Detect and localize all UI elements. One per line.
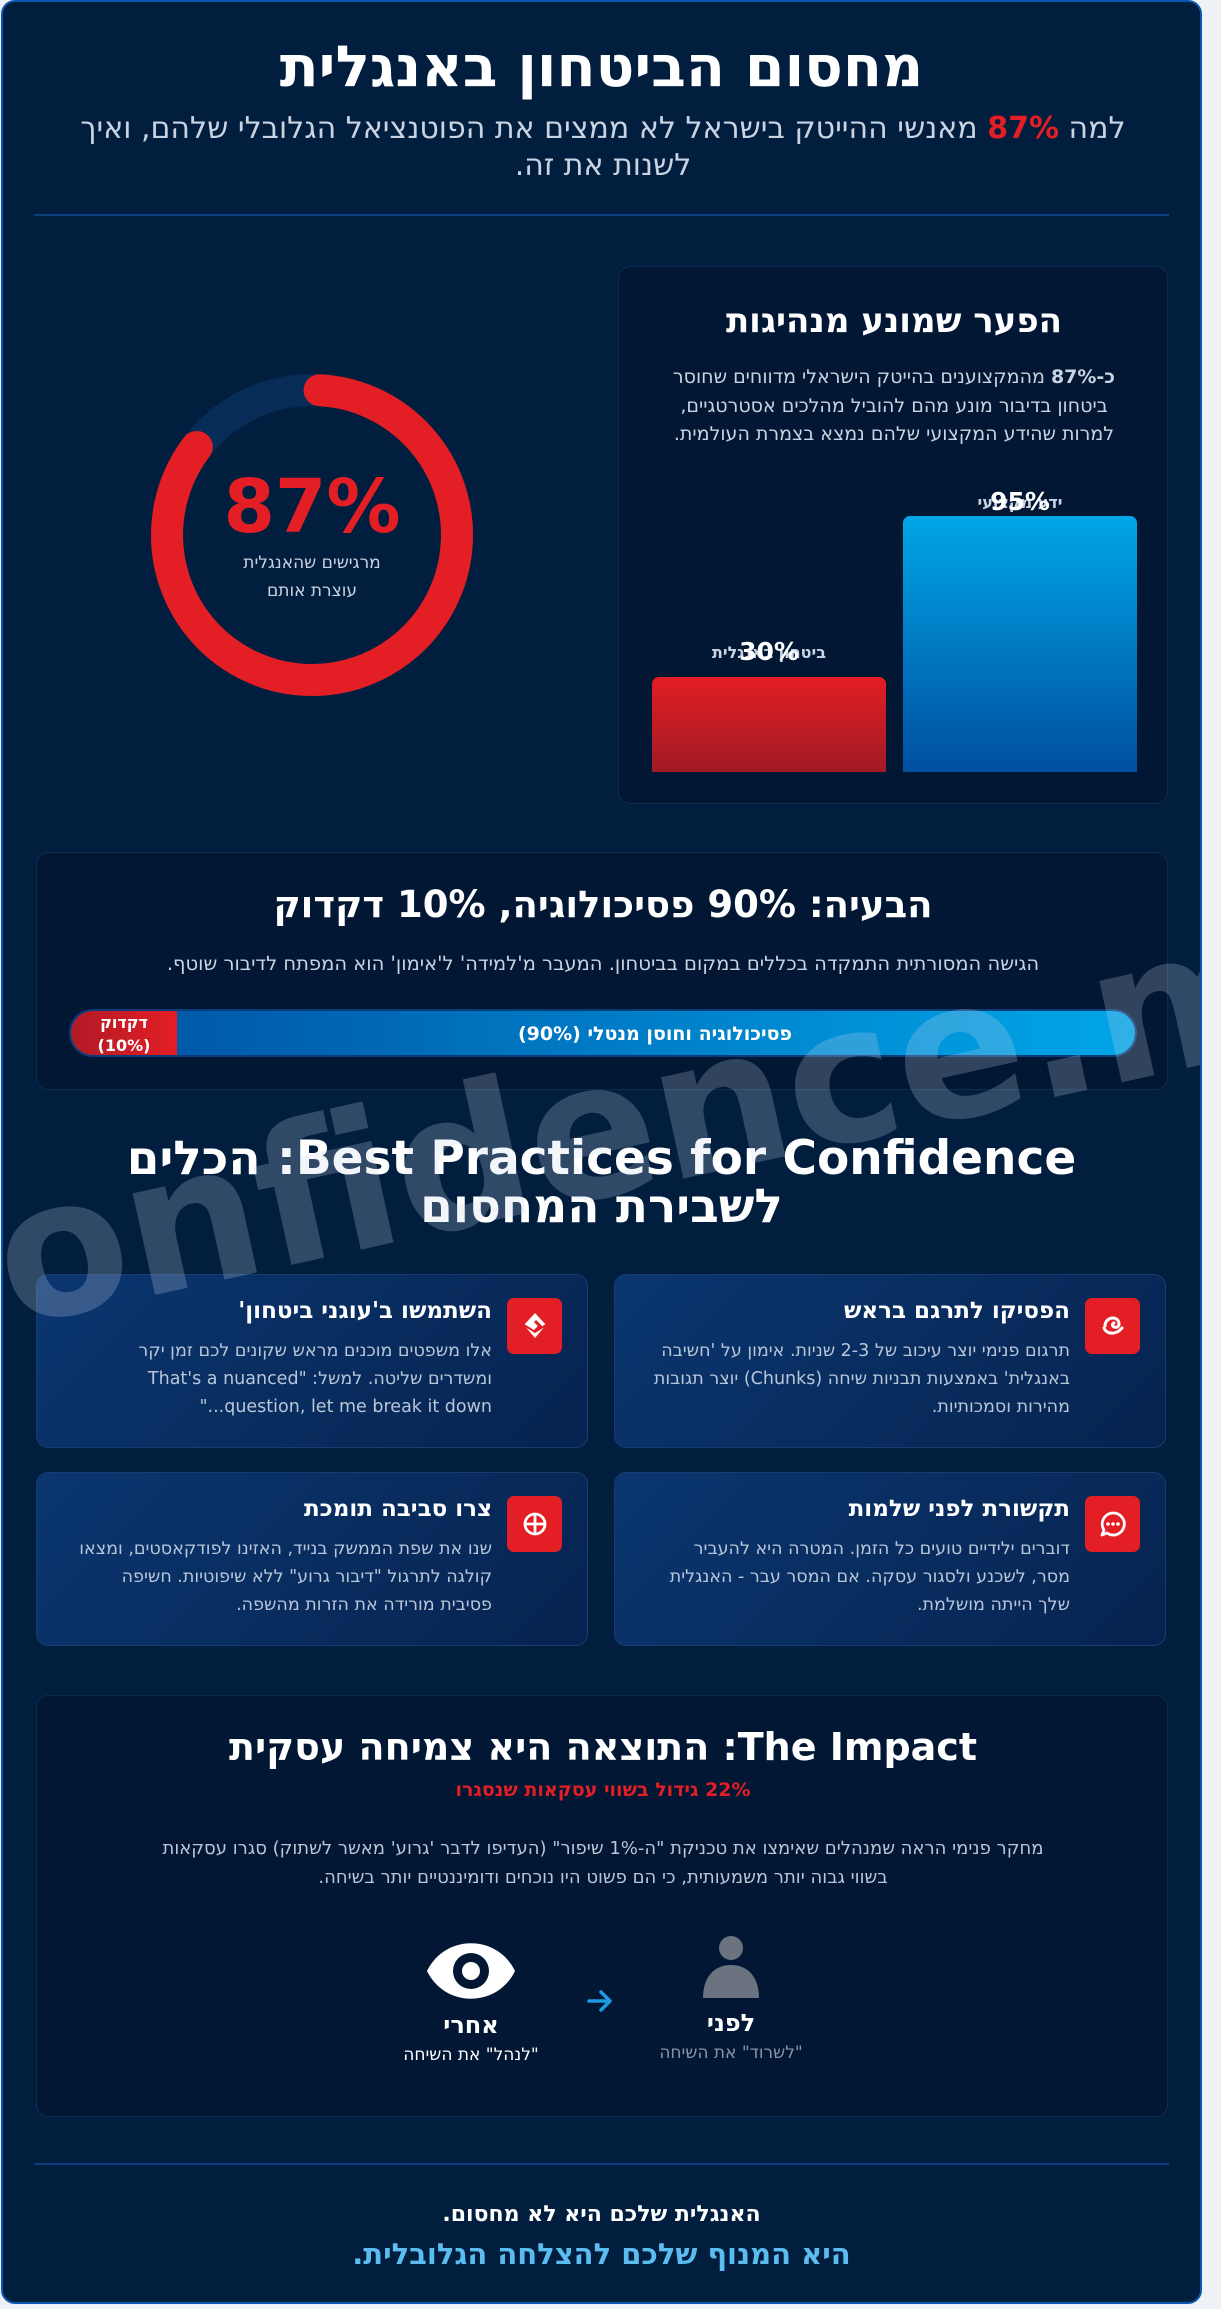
problem text: הגישה המסורתית התמקדה בכללים במקום בביטחון. המעבר מ'למידה' ל'אימון' הוא המפתח לדיבור שוטף. <box>167 952 1039 975</box>
card: supportive environment <box>36 1472 588 1646</box>
grammar segment <box>71 1011 177 1057</box>
card: communication before perfection: מסר, לשכנע ולסגור עסקה. אם המסר עבר - האנגלית <box>670 1567 1070 1587</box>
icon: eye <box>427 1943 515 1999</box>
card: communication before perfection: שלך הייתה מושלמת. <box>917 1595 1070 1615</box>
title: מחסום הביטחון באנגלית <box>280 34 923 100</box>
impact stat: 22% גידול בשווי עסקאות שנסגרו <box>455 1779 751 1801</box>
panel: leadership gap <box>618 266 1168 804</box>
donut label: עוצרת אותם <box>267 581 357 601</box>
footer message: היא המנוף שלכם להצלחה הגלובלית. <box>352 2237 851 2271</box>
panel text: למרות שהידע המקצועי שלהם נמצא בצמרת העולמית. <box>674 423 1114 445</box>
bar chart: 95% <box>990 487 1050 516</box>
card: supportive environment: פסיבית מורידה את הזרות מהשפה. <box>236 1595 492 1615</box>
section heading: best practices: לשבירת המחסום <box>420 1179 783 1234</box>
card: communication before perfection: תקשורת לפני שלמות <box>849 1496 1070 1522</box>
psychology segment label: פסיכולוגיה וחוסן מנטלי (90%) <box>518 1023 792 1045</box>
card: supportive environment: שנו את שפת הממשק בנייד, האזינו לפודקאסטים, ומצאו <box>79 1539 492 1559</box>
icon: globe <box>507 1496 562 1552</box>
arrow <box>587 1990 612 2012</box>
subtitle <box>80 111 1126 183</box>
grammar segment: דקדוק <box>100 1013 148 1032</box>
subtitle: לשנות את זה. <box>515 148 691 183</box>
icon: person <box>703 1936 759 1998</box>
after column <box>403 1943 539 2065</box>
card: confidence anchors <box>36 1274 588 1448</box>
bar chart: 30% <box>739 637 799 666</box>
stacked bar 90/10 <box>69 1009 1137 1057</box>
card: supportive environment: צרו סביבה תומכת <box>304 1496 492 1522</box>
card: stop translating: תרגום פנימי יוצר עיכוב של 2-3 שניות. אימון על 'חשיבה <box>661 1341 1070 1361</box>
card: stop translating <box>614 1274 1166 1448</box>
footer message: האנגלית שלכם היא לא מחסום. <box>442 2202 761 2227</box>
icon: diamond <box>507 1298 562 1354</box>
donut label <box>223 464 401 601</box>
problem heading: הבעיה: 90% פסיכולוגיה, 10% דקדוק <box>273 883 933 926</box>
footer message <box>352 2202 851 2271</box>
panel: the problem <box>36 852 1168 1090</box>
card: confidence anchors: ומשדרים שליטה. למשל: "That's a nuanced <box>148 1369 492 1389</box>
card: confidence anchors: question, let me break it down..." <box>199 1397 492 1417</box>
card: communication before perfection: דוברים ילידיים טועים כל הזמן. המטרה היא להעביר <box>694 1539 1070 1559</box>
donut label: מרגישים שהאנגלית <box>243 553 381 573</box>
icon: chat bubble <box>1085 1496 1140 1552</box>
card: confidence anchors: אלו משפטים מוכנים מראש שקונים לכם זמן יקר <box>138 1341 492 1361</box>
card: supportive environment: קולגה לתרגול "דיבור גרוע" ללא שיפוטיות. חשיפה <box>122 1567 492 1587</box>
section heading: best practices: Best Practices for Confidence: הכלים <box>127 1131 1076 1186</box>
subtitle: למה 87% מאנשי ההייטק בישראל לא ממצים את הפוטנציאל הגלובלי שלהם, ואיך <box>80 111 1126 146</box>
bar: professional knowledge 95% <box>903 487 1137 772</box>
panel: the impact <box>36 1695 1168 2117</box>
after column: "לנהל" את השיחה <box>403 2045 539 2065</box>
panel text <box>673 366 1115 445</box>
impact heading: The Impact: התוצאה היא צמיחה עסקית <box>229 1725 977 1769</box>
card: communication before perfection <box>614 1472 1166 1646</box>
grammar segment: (10%) <box>98 1036 150 1055</box>
impact text: מחקר פנימי הראה שמנהלים שאימצו את טכניקת "ה-1% שיפור" (העדיפו לדבר 'גרוע' מאשר לשתוק) סגרו עסקאות <box>163 1838 1043 1859</box>
panel text: כ-87% מהמקצוענים בהייטק הישראלי מדווחים שחוסר <box>673 366 1115 388</box>
panel text: ביטחון בדיבור מונע מהם להוביל מהלכים אסטרטגיים, <box>680 394 1108 416</box>
bar chart: ביטחון באנגלית <box>712 643 826 662</box>
before column <box>659 1936 803 2063</box>
bar: confidence in English 30% <box>652 637 886 772</box>
impact text <box>162 1838 1043 1888</box>
donut label: 87% <box>223 464 401 550</box>
bar chart: ידע מקצועי <box>977 493 1062 512</box>
donut chart: 87% <box>151 374 473 696</box>
after column: אחרי <box>443 2011 499 2039</box>
card: confidence anchors: השתמשו ב'עוגני ביטחון' <box>238 1298 492 1324</box>
impact text: בשווי גבוה יותר משמעותית, כי הם פשוט היו נוכחים ודומיננטיים יותר בשיחה. <box>318 1867 888 1888</box>
before column: לפני <box>707 2009 755 2037</box>
panel heading: הפער שמונע מנהיגות <box>726 301 1062 341</box>
before column: "לשרוד" את השיחה <box>659 2043 803 2063</box>
section heading: best practices <box>127 1131 1076 1234</box>
card: stop translating: הפסיקו לתרגם בראש <box>844 1298 1070 1324</box>
card: stop translating: באנגלית' באמצעות תבניות שיחה (Chunks) יוצר תגובות <box>654 1369 1070 1389</box>
icon: brain <box>1085 1298 1140 1354</box>
card: stop translating: מהירות וסמכותיות. <box>932 1397 1070 1417</box>
bar chart <box>652 487 1137 772</box>
